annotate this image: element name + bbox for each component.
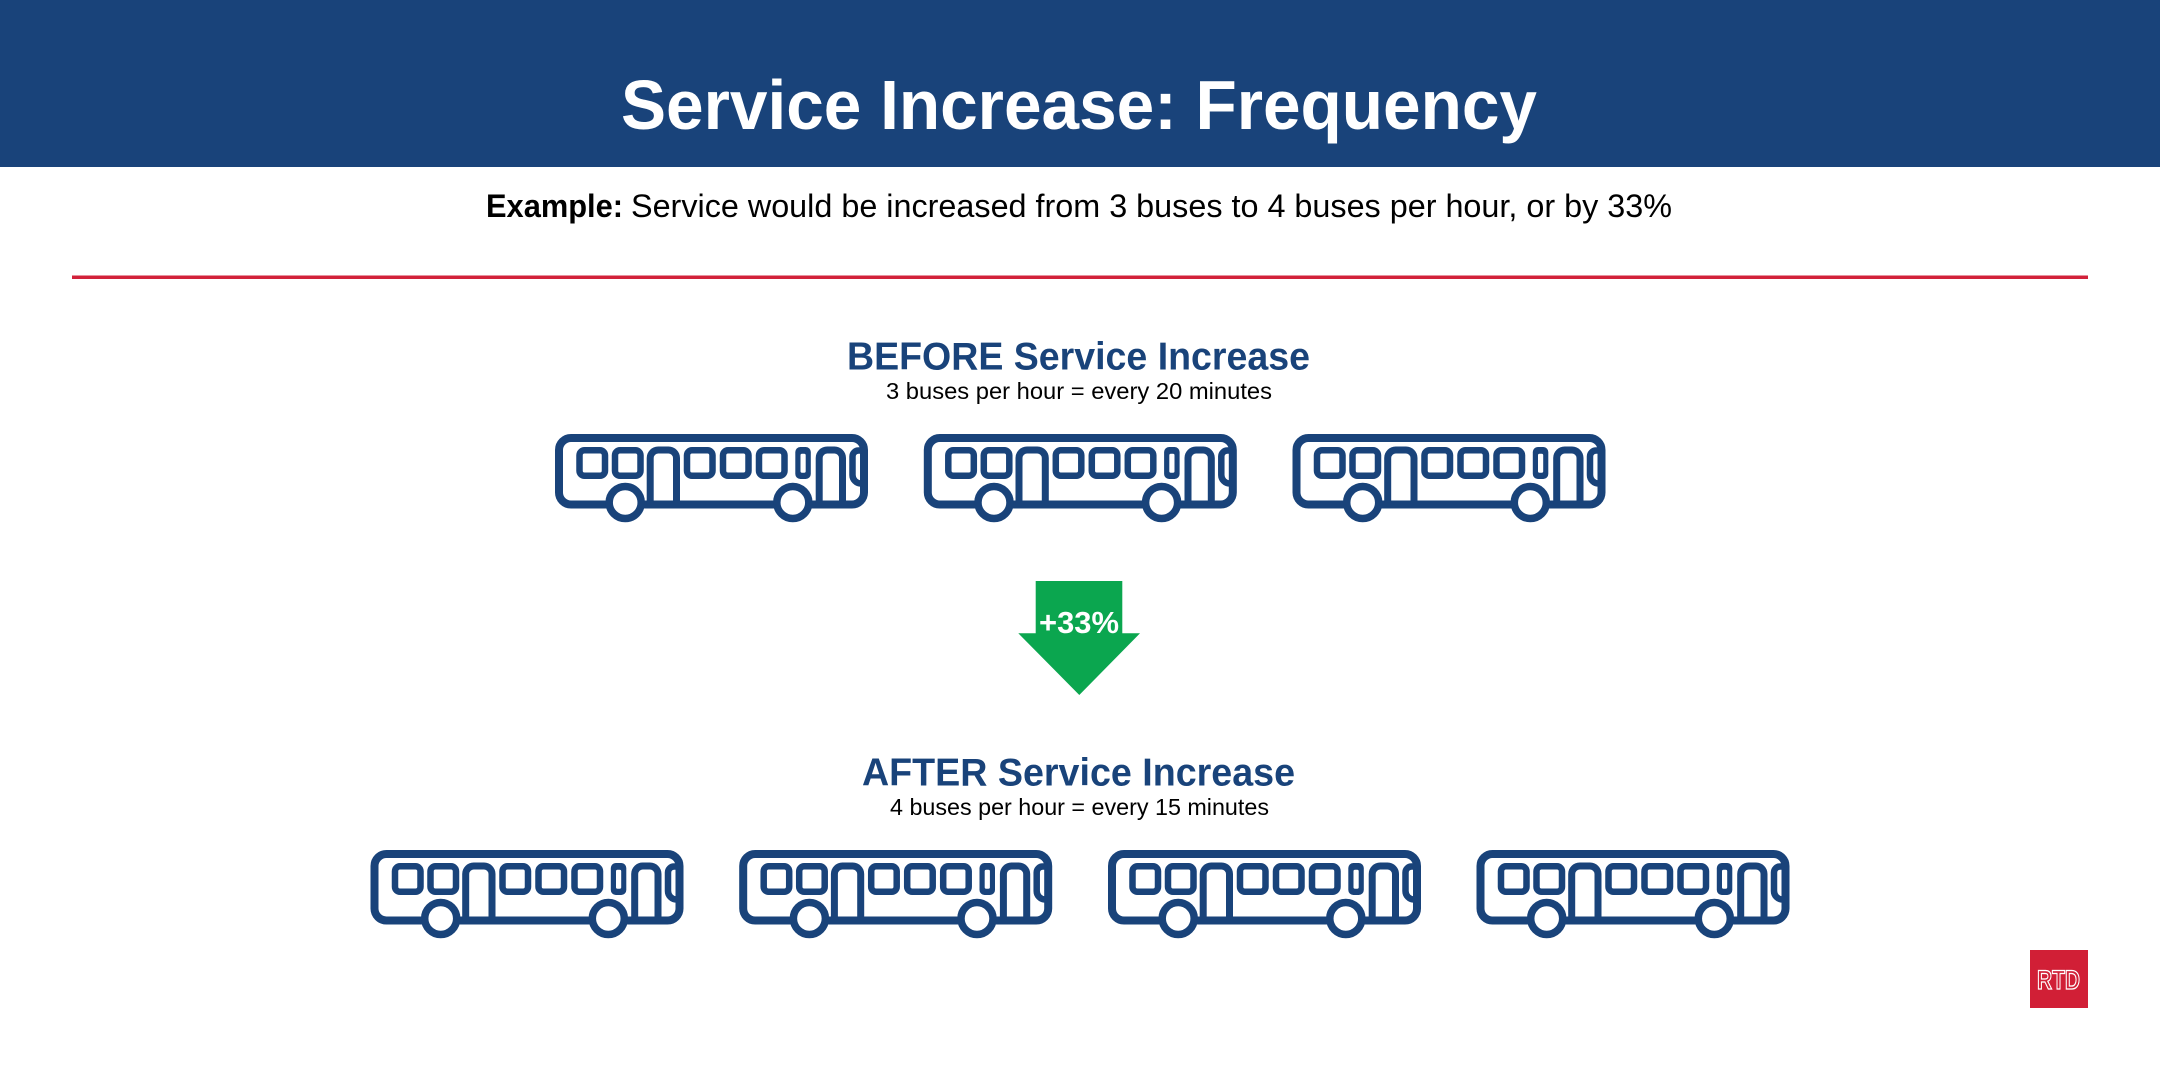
bus icon 3: [1112, 854, 1417, 934]
after heading: AFTER Service Increase: [862, 752, 1295, 794]
bus icon 2: [743, 854, 1048, 934]
bus icon 1: [374, 854, 680, 934]
increase arrow: [1018, 581, 1140, 695]
bus icon 2: [928, 438, 1233, 518]
title: Service Increase: Frequency: [621, 66, 1537, 144]
bus icon 3: [1296, 438, 1602, 518]
after subheading: 4 buses per hour = every 15 minutes: [890, 794, 1269, 820]
increase arrow: +33%: [1039, 605, 1119, 640]
RTD logo: [2030, 950, 2088, 1008]
before buses: [559, 438, 1602, 518]
after buses: [374, 854, 1786, 934]
before heading: BEFORE Service Increase: [847, 336, 1310, 378]
bus icon 1: [559, 438, 864, 518]
header band: [0, 0, 2160, 167]
RTD logo: RTD: [2037, 965, 2080, 995]
example text: Example:: [486, 188, 623, 224]
before subheading: 3 buses per hour = every 20 minutes: [886, 378, 1272, 404]
bus icon 4: [1480, 854, 1786, 934]
example text: Service would be increased from 3 buses to 4 buses per hour, or by 33%: [631, 188, 1672, 224]
